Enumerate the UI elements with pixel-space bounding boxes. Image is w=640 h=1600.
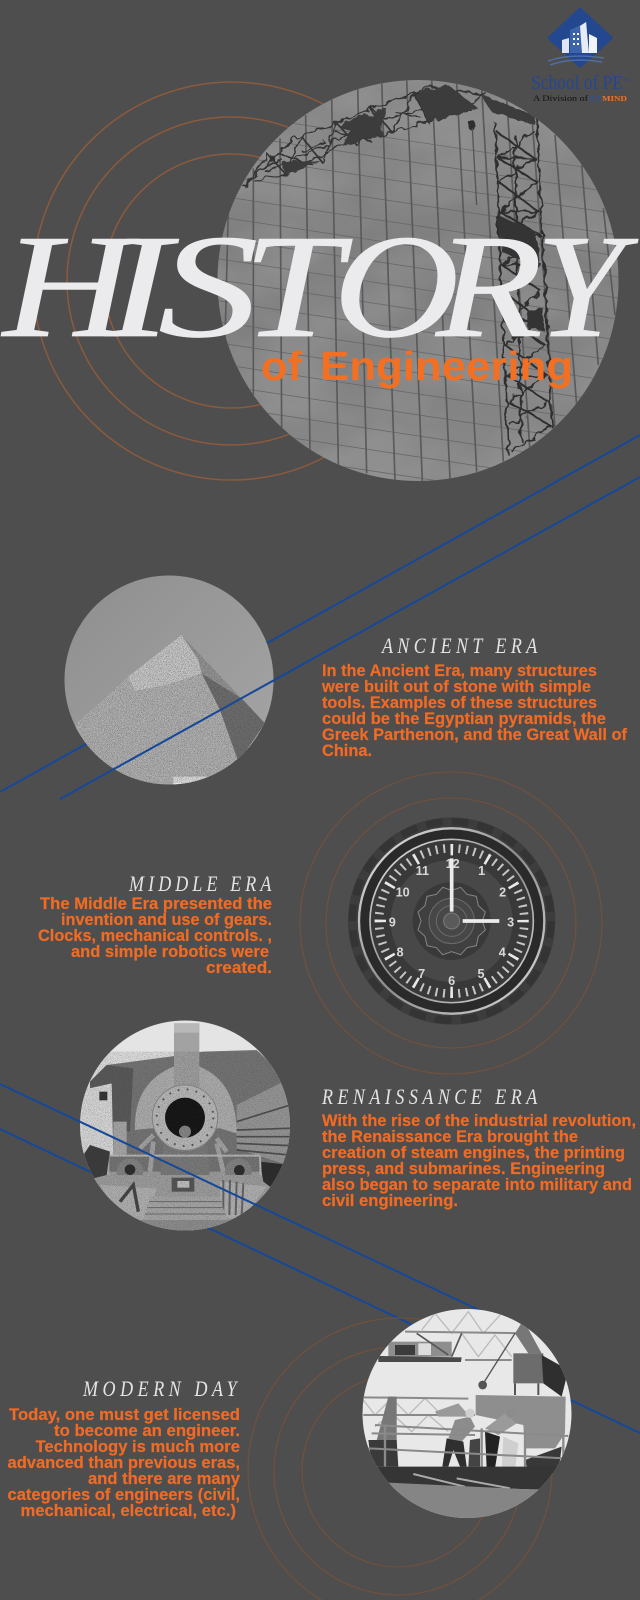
- panel: modern day: [8, 1300, 580, 1600]
- body text: Technology is much more: [36, 1437, 240, 1456]
- heading: MIDDLE ERA: [128, 872, 272, 897]
- logo: School of PE: School of PE: [531, 72, 623, 94]
- body text: also began to separate into military and: [322, 1175, 632, 1194]
- heading: MODERN DAY: [82, 1377, 239, 1402]
- clock numerals: 12: [446, 857, 460, 871]
- heading: ANCIENT ERA: [380, 634, 538, 659]
- photo: construction workers: [362, 1309, 572, 1518]
- panel: ancient era: [60, 570, 627, 790]
- title: HISTORY: S: [158, 205, 259, 369]
- blue diagonal line behind pyramid: [0, 435, 640, 792]
- body text: tools. Examples of these structures: [322, 693, 597, 712]
- logo: School of PE: EDU: [589, 94, 602, 103]
- workers: [442, 1409, 562, 1473]
- blue diagonal line over train: [0, 1084, 500, 1320]
- body text: to become an engineer.: [54, 1421, 240, 1440]
- clock numerals: 2: [499, 886, 506, 900]
- logo: School of PE: TM: [623, 77, 629, 82]
- body text: created.: [206, 958, 272, 977]
- panel: renaissance era: [70, 1015, 636, 1240]
- body text: press, and submarines. Engineering: [322, 1159, 605, 1178]
- body text: China.: [322, 741, 372, 760]
- body text: mechanical, electrical, etc.): [20, 1501, 236, 1520]
- body text: In the Ancient Era, many structures: [322, 661, 597, 680]
- body text: [321, 661, 627, 760]
- body text: invention and use of gears.: [61, 910, 272, 929]
- title: HISTORY: H: [1, 205, 140, 369]
- title: HISTORY: R: [435, 205, 543, 369]
- body text: creation of steam engines, the printing: [322, 1143, 625, 1162]
- clock numerals: 7: [418, 967, 425, 981]
- panel: middle era: [38, 772, 602, 1074]
- clock numerals: 3: [507, 916, 514, 930]
- clock numerals: 5: [477, 967, 485, 981]
- photo: steam locomotive: [80, 1020, 290, 1230]
- logo: School of PE: MIND: [602, 94, 628, 103]
- body text: Greek Parthenon, and the Great Wall of: [322, 725, 627, 744]
- logo: School of PE: A Division of: [533, 94, 588, 103]
- body text: and there are many: [88, 1469, 241, 1488]
- rings around clock: [300, 772, 602, 1074]
- body text: civil engineering.: [322, 1191, 458, 1210]
- clock numerals: 10: [396, 886, 410, 900]
- clock numerals: 1: [478, 864, 485, 878]
- rings behind hero photo: [33, 82, 431, 480]
- photo: pyramid: [60, 570, 280, 790]
- title: HISTORY: [1, 205, 638, 369]
- subtitle: of Engineering: of: [261, 343, 302, 389]
- blue diagonal line over pyramid: [60, 477, 640, 799]
- clock numerals: 11: [416, 864, 429, 878]
- body text: Today, one must get licensed: [9, 1405, 240, 1424]
- title: HISTORY: T: [243, 205, 353, 369]
- photo: clock: [348, 817, 555, 1025]
- body text: The Middle Era presented the: [40, 894, 272, 913]
- clock hands: [452, 858, 499, 921]
- clock numerals: 8: [396, 946, 404, 960]
- clock numerals: 9: [389, 916, 396, 930]
- rings behind construction photo: [248, 1318, 552, 1600]
- body text: [8, 1405, 241, 1520]
- title: HISTORY: Y: [536, 205, 638, 369]
- clock numerals: 4: [499, 946, 506, 960]
- body text: were built out of stone with simple: [321, 677, 591, 696]
- body text: Clocks, mechanical controls. ,: [38, 926, 272, 945]
- subtitle: of Engineering: Engineering: [320, 343, 573, 389]
- heading: RENAISSANCE ERA: [321, 1085, 538, 1110]
- clock numerals: 6: [448, 974, 455, 988]
- body text: advanced than previous eras,: [8, 1453, 240, 1472]
- body text: categories of engineers (civil,: [8, 1485, 240, 1504]
- title: HISTORY: O: [333, 205, 459, 369]
- body text: the Renaissance Era brought the: [322, 1127, 578, 1146]
- logo: School of PE: [531, 7, 629, 103]
- hero photo: glass tower with crane: [215, 78, 625, 509]
- body text: [38, 894, 272, 977]
- body text: With the rise of the industrial revolution,: [322, 1111, 636, 1130]
- blue diagonal line behind train: [0, 1129, 640, 1433]
- body text: [322, 1111, 636, 1210]
- body text: and simple robotics were: [71, 942, 269, 961]
- body text: could be the Egyptian pyramids, the: [322, 709, 606, 728]
- clock numerals: [389, 857, 514, 988]
- crane: [243, 85, 552, 455]
- title: HISTORY: I: [105, 205, 179, 368]
